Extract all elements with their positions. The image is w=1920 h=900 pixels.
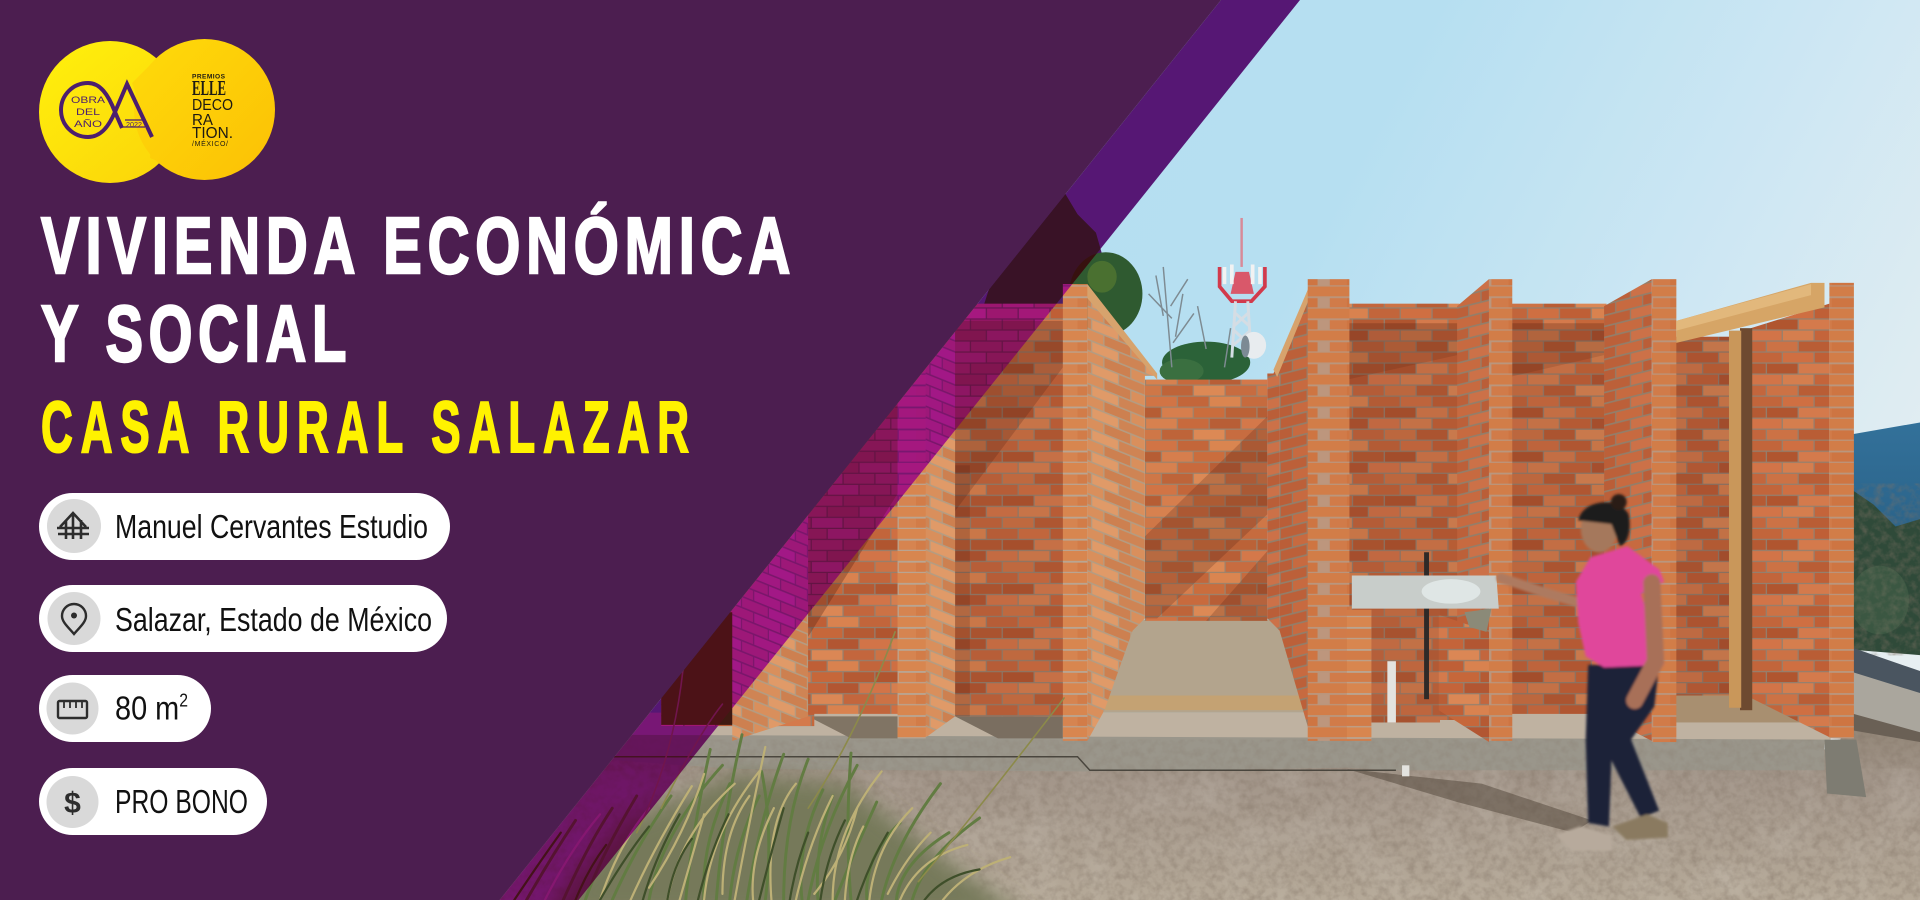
icon: house frame [47, 499, 101, 553]
pier ends [898, 284, 926, 738]
pill: architect: Manuel Cervantes Estudio [115, 508, 428, 545]
sink [1347, 552, 1499, 776]
wordmark: Premios Elle Decoration México: ELLE [192, 76, 226, 100]
dark purple left panel [0, 0, 1221, 900]
wall: door bay [1675, 337, 1731, 696]
icon: dollar sign: $ [64, 787, 81, 820]
near arm [1635, 583, 1656, 700]
logo circle: Elle Decoration [132, 39, 275, 180]
title [41, 201, 796, 378]
icon: dollar sign [46, 776, 98, 828]
emblem: OA: 2022 [126, 122, 142, 129]
wall: left bay [953, 304, 1065, 716]
emblem: OA: OBRA [71, 95, 106, 106]
title: Y SOCIAL [41, 289, 352, 378]
icon: map pin [48, 592, 100, 645]
wordmark: Premios Elle Decoration México: TION. [192, 125, 233, 142]
logo: Obra del Año / Premios Elle Decoration [39, 39, 275, 183]
wall: far left [661, 304, 814, 726]
pill: budget: PRO BONO [115, 783, 248, 820]
head [1581, 506, 1618, 552]
mountain [1843, 422, 1920, 539]
metal sheets, right [1849, 647, 1920, 742]
ground [0, 716, 1920, 900]
far arm [1501, 578, 1578, 602]
purple diagonal band over the photo [500, 0, 1300, 900]
trees: behind the house [980, 190, 1250, 383]
emblem: OA: AÑO [74, 119, 102, 130]
subtitle: CASA RURAL SALAZAR [41, 388, 697, 468]
pill: location: Salazar, Estado de México [115, 601, 432, 638]
logo circle: Obra del Año [39, 41, 181, 183]
icon: ruler [46, 682, 98, 734]
title: VIVIENDA ECONÓMICA [41, 201, 796, 290]
wordmark: Premios Elle Decoration México: DECO [192, 97, 233, 114]
concrete slab [600, 620, 1866, 797]
emblem: OA: DEL [76, 107, 100, 118]
legs [1586, 665, 1659, 827]
wordmark: Premios Elle Decoration México: PREMIOS [192, 74, 226, 80]
wordmark: Premios Elle Decoration México [192, 74, 233, 148]
pill: location [39, 585, 447, 652]
woman walking [1501, 494, 1668, 851]
brick walls [661, 279, 1854, 742]
pill: area: 2 [179, 690, 188, 710]
wall: right bays [1347, 304, 1460, 720]
emblem: OA [61, 83, 152, 137]
pill: budget [39, 768, 267, 835]
wall: centre back [1145, 380, 1267, 621]
wooden door frame [1676, 283, 1824, 710]
wordmark: Premios Elle Decoration México: /MÉXICO/ [192, 139, 228, 148]
icon: telecom tower [1220, 218, 1266, 359]
pill: architect [39, 493, 450, 560]
wordmark: Premios Elle Decoration México: RA [192, 112, 213, 129]
grass [514, 632, 1064, 900]
shirt [1576, 546, 1664, 667]
pill: area: 80 m [115, 690, 188, 726]
pill: area [39, 675, 211, 742]
shoes [1555, 827, 1613, 851]
trees: right [1843, 484, 1920, 655]
pier sides [1087, 284, 1157, 741]
